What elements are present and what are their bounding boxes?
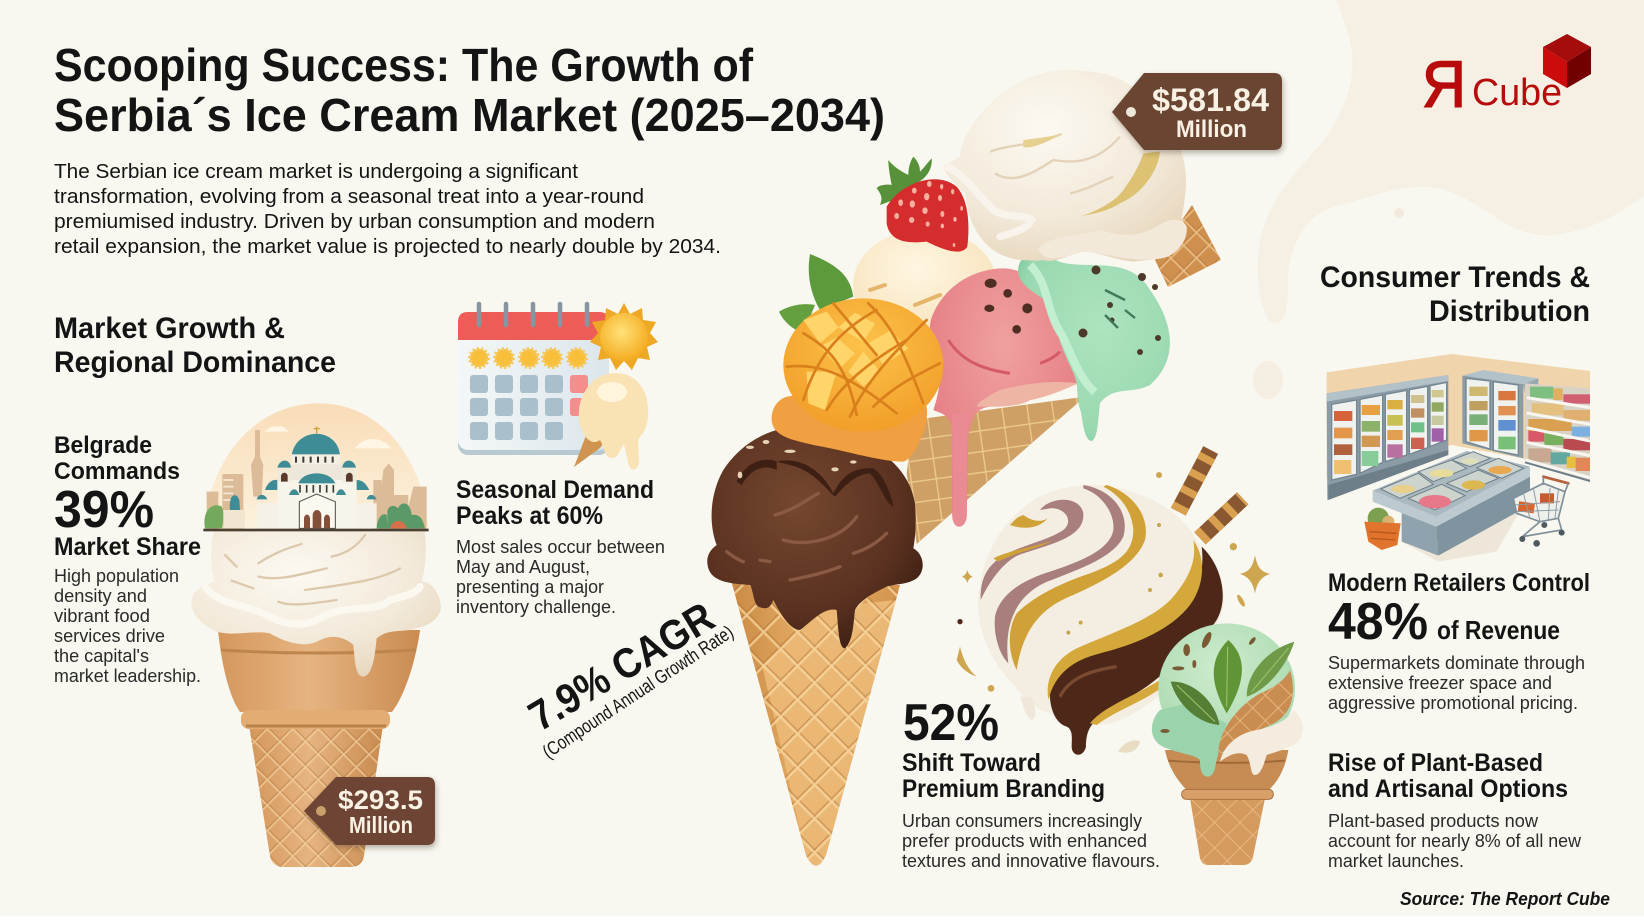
store walls: [1327, 354, 1590, 478]
stat: CAGR: 7.9% CAGR: [520, 593, 722, 740]
logo: RCube: [1422, 34, 1591, 121]
stat: Belgrade market share: High population: [54, 565, 179, 586]
price tag: $581.84 million: Million: [1176, 116, 1247, 143]
title: [54, 39, 885, 141]
stat: seasonal demand: presenting a major: [456, 576, 604, 597]
stat: plant-based: Plant-based products now: [1328, 810, 1539, 831]
heading: consumer trends: [1320, 261, 1590, 328]
stat: Belgrade market share: 39%: [54, 481, 154, 539]
chocolate scoop: [707, 427, 923, 648]
stat: Belgrade market share: the capital's: [54, 645, 149, 666]
chocolate and mango scoops: [707, 254, 943, 648]
plant-based cone: [1152, 623, 1303, 865]
cone: [1165, 750, 1288, 865]
cup and rim: [218, 630, 420, 729]
price tag: $581.84 million: $581.84: [1152, 82, 1269, 118]
wafer behind vanilla: [1155, 205, 1221, 287]
cone: [249, 725, 383, 867]
logo wordmark: Cube: [1472, 72, 1562, 114]
stat: premium branding: Shift Toward: [902, 749, 1041, 777]
source credit: Source: The Report Cube: [1400, 889, 1610, 909]
stat: seasonal demand: May and August,: [456, 556, 590, 577]
intro paragraph: retail expansion, the market value is projected to nearly double by 2034.: [54, 235, 721, 258]
stat: plant-based: Rise of Plant-Based: [1328, 749, 1543, 777]
stat: plant-based: and Artisanal Options: [1328, 775, 1568, 803]
premium swirl scoop: [978, 485, 1224, 755]
stat: modern retailers: of Revenue: [1437, 615, 1560, 645]
stat: plant-based: market launches.: [1328, 850, 1464, 871]
stat: premium branding: 52%: [903, 694, 999, 752]
stat: Belgrade market share: Market Share: [54, 533, 201, 561]
stat: Belgrade market share: density and: [54, 585, 147, 606]
heading: market growth: [54, 312, 336, 379]
vanilla scoop: [943, 70, 1187, 262]
stat: modern retailers: Supermarkets dominate through: [1328, 652, 1585, 673]
dome skyline of Belgrade: [203, 403, 429, 531]
stat: Belgrade market share: services drive: [54, 625, 165, 646]
intro paragraph: transformation, evolving from a seasonal treat into a year-round: [54, 185, 644, 208]
stat: premium branding: prefer products with enhanced: [902, 830, 1147, 851]
stat: premium branding: [902, 694, 1160, 871]
tilted waffle cone: [907, 397, 1085, 544]
stat: seasonal demand: [456, 476, 665, 617]
intro paragraph: The Serbian ice cream market is undergoing a significant: [54, 160, 578, 183]
panel: Belgrade ice cream cone: [191, 403, 441, 867]
mint scoop: [1152, 623, 1295, 777]
stat: premium branding: textures and innovative flavours.: [902, 850, 1160, 871]
shopping cart: [1513, 477, 1568, 547]
cream melt: [1220, 710, 1303, 775]
stat: Belgrade market share: Commands: [54, 458, 180, 485]
sugar cone: [731, 580, 900, 866]
stat: Belgrade market share: market leadership.: [54, 665, 201, 686]
stat: modern retailers: extensive freezer space and: [1328, 672, 1552, 693]
shopping basket: [1364, 508, 1401, 550]
premium swirl and plant-based cone: [957, 450, 1303, 865]
wafer sticks: [1178, 450, 1243, 538]
stat: premium branding: Urban consumers increasingly: [902, 810, 1143, 831]
price tag: $581.84 million: [1112, 73, 1282, 150]
illustration: supermarket freezer aisle: [1327, 354, 1590, 562]
stat: plant-based: [1328, 749, 1582, 871]
hero: stacked ice cream cone: [707, 70, 1221, 866]
stat: modern retailers: Modern Retailers Control: [1328, 569, 1590, 597]
stat: seasonal demand: Most sales occur between: [456, 536, 665, 557]
mint leaves: [779, 254, 853, 333]
stat: Belgrade market share: [54, 432, 201, 686]
strawberry: [877, 157, 968, 252]
stat: plant-based: account for nearly 8% of all new: [1328, 830, 1582, 851]
price tag: $293.5 million: [304, 777, 435, 845]
mint scoop with chips: [1018, 255, 1170, 441]
leaves: [1171, 640, 1294, 725]
logo cube: [1543, 34, 1591, 88]
stat: CAGR: (Compound Annual Growth Rate): [539, 622, 738, 763]
stat: seasonal demand: Seasonal Demand: [456, 476, 654, 504]
logo mark: Я: [1422, 47, 1466, 121]
price tag: $293.5 million: Million: [349, 812, 413, 838]
sparkles: [957, 472, 1270, 753]
intro paragraph: [54, 160, 721, 258]
pink scoop with chips: [930, 268, 1078, 527]
wafer: [1218, 670, 1293, 757]
intro paragraph: premiumised industry. Driven by urban consumption and modern: [54, 210, 655, 233]
heading: market growth: Market Growth &: [54, 312, 285, 345]
back fridge: [1462, 370, 1538, 458]
chest freezer: [1373, 451, 1530, 562]
icon: calendar with sun and ice cream: [458, 303, 658, 470]
stat: modern retailers: aggressive promotional pricing.: [1328, 692, 1578, 713]
title: Serbia´s Ice Cream Market (2025–2034): [54, 89, 885, 141]
stat: premium branding: Premium Branding: [902, 775, 1105, 803]
heading: market growth: Regional Dominance: [54, 346, 336, 379]
heading: consumer trends: Distribution: [1429, 295, 1590, 328]
stat: modern retailers: 48%: [1328, 593, 1428, 651]
grocery shelves: [1525, 383, 1590, 482]
stat: Belgrade market share: Belgrade: [54, 432, 152, 459]
heading: consumer trends: Consumer Trends &: [1320, 261, 1590, 294]
cream scoop: [853, 229, 997, 341]
vanilla scoop: [191, 531, 441, 677]
stat: modern retailers: [1328, 569, 1590, 713]
title: Scooping Success: The Growth of: [54, 39, 754, 91]
left wall fridges: [1327, 375, 1448, 500]
mango body: [783, 298, 943, 432]
stat: Belgrade market share: vibrant food: [54, 605, 150, 626]
stat: seasonal demand: Peaks at 60%: [456, 502, 603, 530]
price tag: $293.5 million: $293.5: [338, 785, 423, 815]
stat: seasonal demand: inventory challenge.: [456, 596, 616, 617]
mango base: [772, 396, 927, 462]
